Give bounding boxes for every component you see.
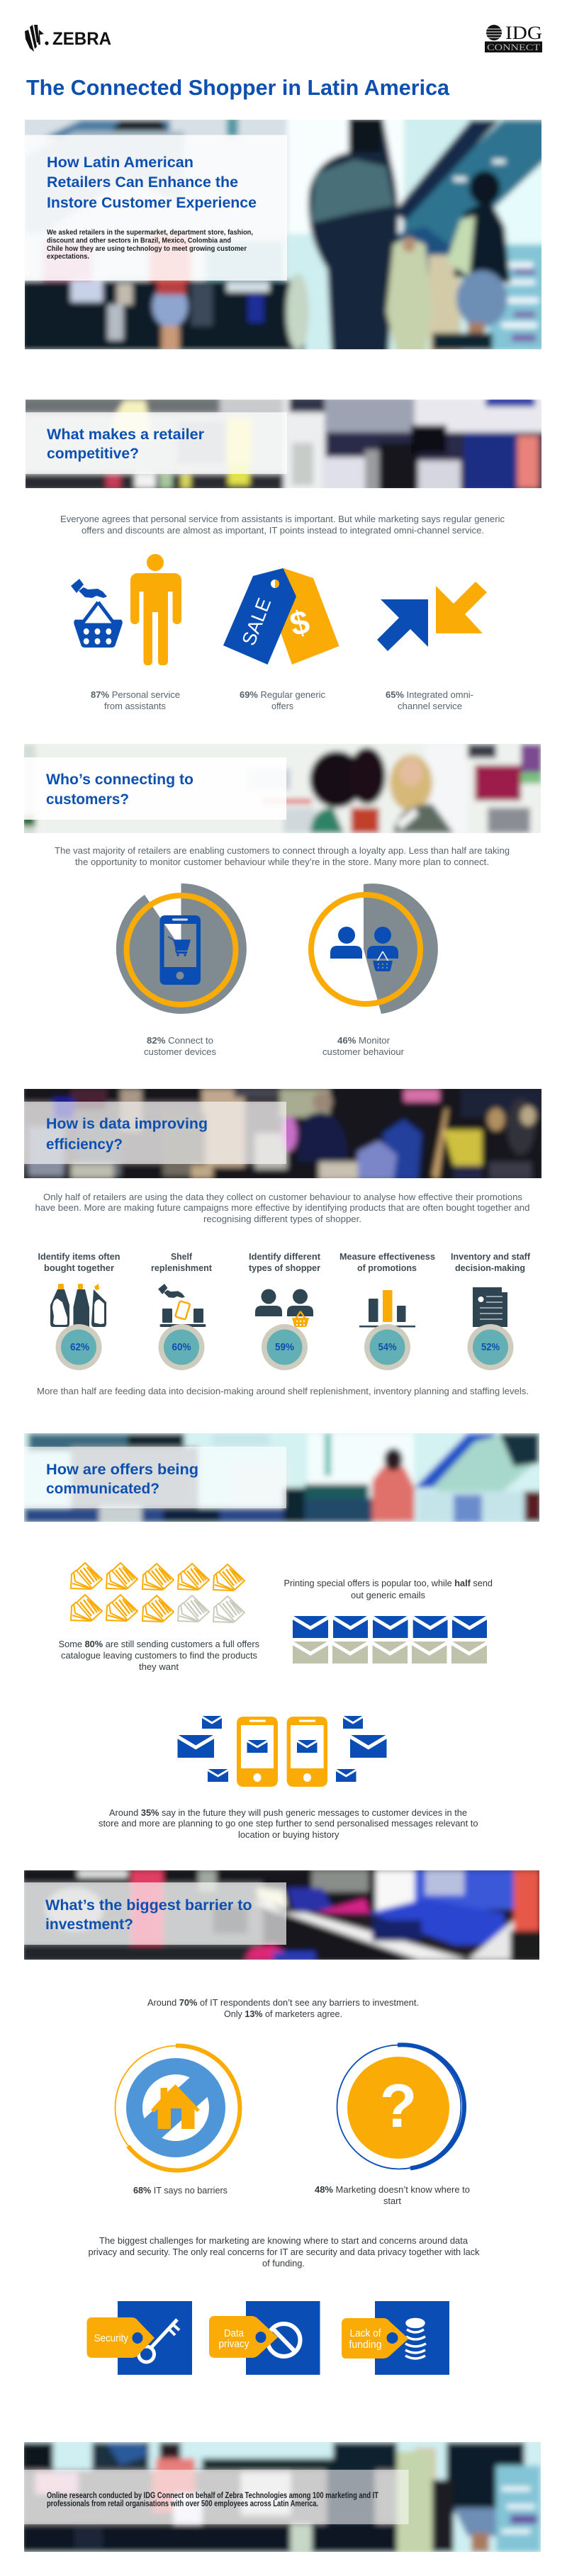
ring: 62%: 62% <box>70 1341 89 1353</box>
text: competitiveness intro: Everyone agrees that personal service from assistants is important. But while marketing says regular generic <box>60 514 505 524</box>
chart: 48% marketing doesn't know <box>337 2045 464 2169</box>
stat: regular generic offers <box>240 689 325 711</box>
icon: phone with cart <box>160 915 201 985</box>
stat: omni-channel service: 65% Integrated omni- <box>386 689 473 700</box>
heading <box>47 1464 198 1493</box>
panel: what makes a retailer competitive banner <box>21 397 546 492</box>
stat: IT says no barriers: 68% IT says no barriers <box>133 2185 228 2196</box>
hero intro text: discount and other sectors in Brazil, Mexico, Colombia and <box>47 237 231 245</box>
panel: barrier banner <box>21 1867 546 1962</box>
text: printed offers and emails <box>284 1578 493 1600</box>
ring: 62% <box>55 1324 102 1370</box>
text: competitiveness intro: offers and discounts are almost as important, IT points instead to integrated omni-channel service. <box>82 525 484 536</box>
icon: prohibition <box>268 2324 301 2356</box>
icon: no sign with house <box>133 2066 218 2150</box>
text: data intro: have been. More are making future campaigns more effective by identifying products that are often bought together and <box>35 1202 530 1213</box>
column heading <box>38 1251 120 1273</box>
icon: sale tags <box>223 568 339 665</box>
column heading: bought together <box>44 1262 114 1273</box>
ring: 59%: 59% <box>275 1341 294 1353</box>
text: challenges <box>88 2235 480 2269</box>
column heading: Shelf <box>171 1251 193 1262</box>
heading <box>46 1116 208 1153</box>
hero intro text: expectations. <box>47 252 89 261</box>
stat: regular generic offers: offers <box>271 701 293 711</box>
text: printed offers and emails: Printing special offers is popular too, while half send <box>284 1578 493 1588</box>
text: connecting intro: the opportunity to monitor customer behaviour while they’re in the store. Many more plan to connect. <box>75 857 489 867</box>
column: shelf replenishment <box>151 1251 213 1370</box>
heading: What makes a retailer <box>47 426 204 443</box>
heading: How are offers being <box>46 1462 198 1478</box>
hero text panel <box>25 135 287 281</box>
card: lack of funding <box>342 2301 449 2375</box>
icon: integrated arrows <box>377 582 487 651</box>
banner text panel <box>24 757 286 820</box>
column heading: Identify items often <box>38 1251 120 1262</box>
logo: IDG Connect <box>485 23 542 52</box>
icon: two people with basket <box>330 927 398 971</box>
heading <box>46 774 193 804</box>
text: barriers intro: Around 70% of IT respondents don’t see any barriers to investment. <box>147 1997 419 2008</box>
icon: personal service <box>71 554 181 665</box>
heading: How is data improving <box>46 1116 208 1132</box>
column: identify shopper types <box>249 1251 321 1370</box>
icon: question mark: ? <box>380 2072 417 2140</box>
column heading: decision-making <box>455 1262 525 1273</box>
card: data privacy <box>209 2301 320 2375</box>
heading <box>45 1899 252 1929</box>
column heading <box>339 1251 435 1273</box>
text: catalogue stat <box>59 1639 259 1672</box>
footer text panel <box>24 2470 408 2524</box>
column heading: Measure effectiveness <box>339 1251 435 1262</box>
banner text panel <box>24 1102 286 1164</box>
column heading <box>151 1251 213 1273</box>
stat: connect to devices: 82% Connect to <box>147 1035 213 1046</box>
column heading <box>451 1251 531 1273</box>
tag: data privacy <box>209 2316 278 2358</box>
stat: regular generic offers: 69% Regular generic <box>240 689 325 700</box>
column: inventory and staff <box>451 1251 531 1370</box>
text: data intro: recognising different types of shopper. <box>203 1214 361 1224</box>
text: connecting intro <box>55 845 510 867</box>
text: catalogue stat: Some 80% are still sending customers a full offers <box>59 1639 259 1649</box>
logo: IDG Connect: CONNECT <box>487 42 540 52</box>
photo: clothing store <box>21 397 546 492</box>
chart: 46% monitor behaviour <box>311 883 438 1014</box>
hero intro text: We asked retailers in the supermarket, department store, fashion, <box>47 228 253 237</box>
heading: competitive? <box>47 446 139 462</box>
text: challenges: of funding. <box>262 2258 305 2269</box>
heading: communicated? <box>46 1481 159 1497</box>
icon: basket <box>74 602 123 648</box>
icon: people and basket <box>255 1289 313 1327</box>
banner text panel <box>24 1447 286 1508</box>
stat: marketing doesn't know: start <box>383 2196 401 2206</box>
text: data intro: Only half of retailers are using the data they collect on customer behaviour to analyse how effective their promotions <box>43 1192 523 1202</box>
panel: hero banner <box>21 113 546 354</box>
photo: blurred crowd <box>21 2437 546 2554</box>
text: data intro <box>35 1192 530 1224</box>
column heading: Inventory and staff <box>451 1251 531 1262</box>
text: catalogue stat: they want <box>139 1661 179 1672</box>
logo: Zebra <box>25 25 111 52</box>
text: challenges: privacy and security. The only real concerns for IT are security and data privacy together with lack <box>88 2247 480 2257</box>
tag: security: Security <box>94 2332 128 2344</box>
stat: monitor behaviour: customer behaviour <box>322 1046 405 1057</box>
banner text panel <box>26 412 287 474</box>
icon: hand <box>71 579 107 598</box>
hero intro text: Chile how they are using technology to meet growing customer <box>47 244 247 253</box>
icon: sale tags: SALE <box>238 595 275 648</box>
icon: assistant figure <box>130 554 181 665</box>
logo: Zebra: ZEBRA <box>52 29 111 49</box>
photo: woman in a mall <box>21 1430 546 1525</box>
hero intro text <box>47 228 253 261</box>
column heading <box>249 1251 321 1273</box>
column heading: of promotions <box>357 1262 417 1273</box>
icon: document <box>473 1287 507 1327</box>
stat: monitor behaviour: 46% Monitor <box>337 1035 391 1046</box>
photo: women in a shop <box>21 740 546 836</box>
ring: 54% <box>364 1324 410 1370</box>
ring: 54%: 54% <box>378 1341 397 1353</box>
hero heading: Retailers Can Enhance the <box>47 174 238 191</box>
tag: lack of funding <box>342 2318 408 2358</box>
photo: clothes on a table <box>21 1867 546 1962</box>
tag: data privacy: privacy <box>218 2338 249 2350</box>
chart: 82% connect to devices <box>116 883 247 1014</box>
photo: blurred shoppers in a mall <box>21 113 546 354</box>
tag: data privacy: Data <box>224 2327 245 2339</box>
chart: 68% IT says no barriers <box>115 2045 240 2170</box>
panel: data efficiency banner <box>24 1089 541 1178</box>
stat: personal service <box>91 689 180 711</box>
ring: 60% <box>159 1324 204 1370</box>
icon: shelf <box>158 1284 206 1327</box>
stat: marketing doesn't know: 48% Marketing doesn’t know where to <box>315 2184 470 2195</box>
hero heading <box>47 154 257 211</box>
ring: 60%: 60% <box>172 1341 191 1353</box>
methodology text: professionals from retail organisations with over 500 employees across Latin America. <box>47 2498 318 2508</box>
tag: lack of funding: Lack of <box>350 2327 381 2339</box>
icon: phones receiving messages <box>176 1716 388 1787</box>
heading: efficiency? <box>46 1136 123 1153</box>
icon: bar chart <box>359 1290 415 1328</box>
text: data closing line: More than half are feeding data into decision-making around shelf replenishment, inventory planning and staffing levels. <box>37 1386 529 1396</box>
panel: offers banner <box>21 1430 546 1525</box>
phone right <box>287 1717 327 1787</box>
heading: customers? <box>46 791 129 808</box>
tag: lack of funding: funding <box>349 2339 381 2351</box>
phone left <box>237 1717 278 1787</box>
icon: sale tags: $ <box>286 602 313 643</box>
heading: What’s the biggest barrier to <box>45 1897 252 1914</box>
stat: omni-channel service <box>386 689 473 711</box>
ring: 59% <box>262 1324 308 1370</box>
heading <box>47 426 204 462</box>
logo: IDG Connect: IDG <box>505 23 542 43</box>
text: catalogue stat: catalogue leaving customers to find the products <box>61 1650 257 1661</box>
stat: connect to devices <box>144 1035 216 1057</box>
column heading: replenishment <box>151 1262 213 1273</box>
panel: footer methodology banner <box>21 2437 546 2554</box>
photo: crowd <box>24 1089 541 1178</box>
heading: investment? <box>45 1916 133 1933</box>
title: The Connected Shopper in Latin America <box>26 75 450 100</box>
stat: monitor behaviour <box>322 1035 405 1057</box>
text: barriers intro <box>147 1997 419 2019</box>
panel: who's connecting banner <box>21 740 546 836</box>
icon: key <box>139 2320 179 2362</box>
column heading: Identify different <box>249 1251 321 1262</box>
card: security <box>86 2301 192 2375</box>
ring: 52% <box>468 1324 513 1370</box>
text: barriers intro: Only 13% of marketers agree. <box>224 2009 342 2019</box>
text: connecting intro: The vast majority of retailers are enabling customers to connect through a loyalty app. Less than half are taking <box>55 845 510 856</box>
banner text panel <box>24 1882 286 1945</box>
column heading: types of shopper <box>249 1262 320 1273</box>
icon: bottles <box>50 1284 106 1327</box>
hero heading: Instore Customer Experience <box>47 195 257 211</box>
heading: Who’s connecting to <box>46 772 193 788</box>
column: identify items bought together <box>38 1251 120 1370</box>
stat: omni-channel service: channel service <box>398 701 462 711</box>
text: push messages: store and more are planning to go one step further to send personalised messages relevant to <box>99 1818 478 1829</box>
stat: marketing doesn't know <box>315 2184 470 2206</box>
ring: 52%: 52% <box>481 1341 500 1353</box>
tag: security <box>86 2317 155 2358</box>
column: measure promotions <box>339 1251 435 1370</box>
stat: connect to devices: customer devices <box>144 1046 216 1057</box>
text: printed offers and emails: out generic emails <box>351 1590 425 1600</box>
icon: coins <box>405 2320 426 2358</box>
text: push messages <box>99 1807 478 1840</box>
icon row: emails half <box>291 1616 488 1663</box>
stat: personal service: from assistants <box>104 701 166 711</box>
icon row: catalogues 80% <box>71 1563 245 1622</box>
methodology text: Online research conducted by IDG Connect on behalf of Zebra Technologies among 100 marketing and IT <box>47 2490 379 2500</box>
text: competitiveness intro <box>60 514 505 536</box>
text: challenges: The biggest challenges for marketing are knowing where to start and concerns around data <box>99 2235 468 2246</box>
hero heading: How Latin American <box>47 154 193 171</box>
methodology text <box>47 2490 379 2508</box>
stat: personal service: 87% Personal service <box>91 689 180 700</box>
text: push messages: Around 35% say in the future they will push generic messages to customer devices in the <box>109 1807 467 1818</box>
text: push messages: location or buying history <box>238 1829 339 1840</box>
